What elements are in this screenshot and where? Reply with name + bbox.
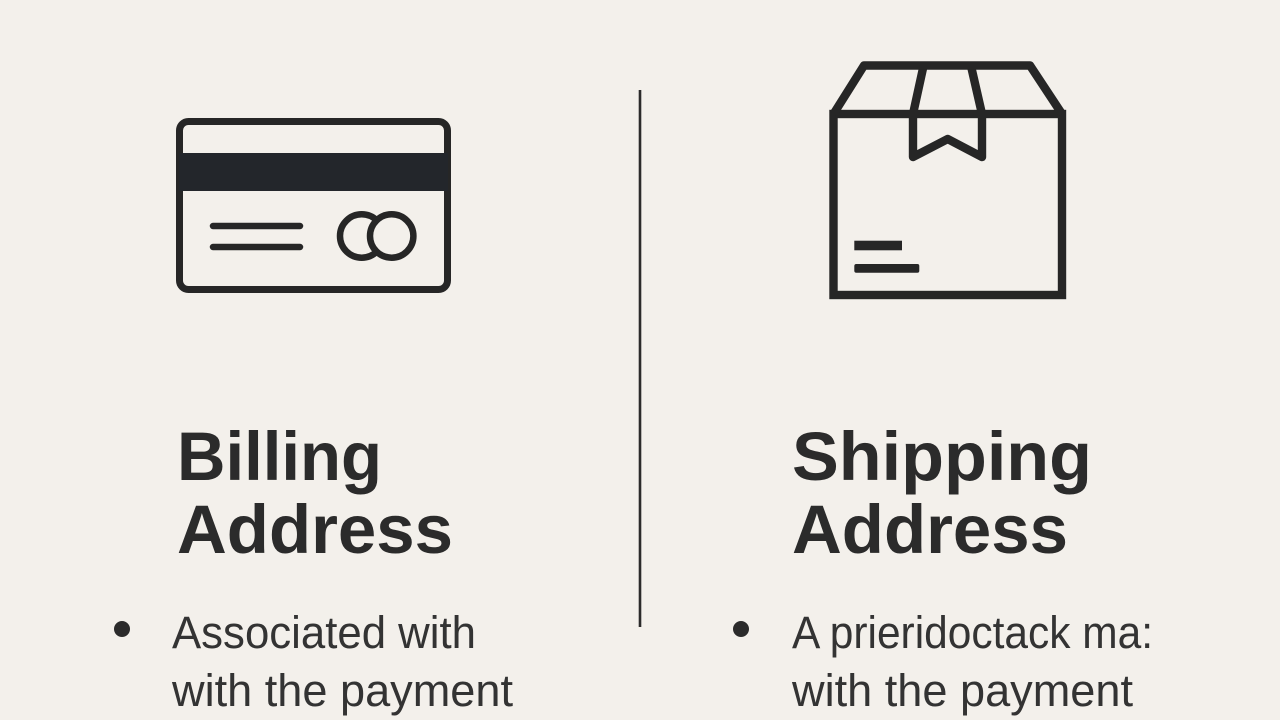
panel: billing address <box>114 122 513 716</box>
icon: package box <box>834 66 1062 295</box>
heading: shipping address: Address <box>792 491 1068 568</box>
panel: shipping address <box>733 66 1153 716</box>
divider <box>639 90 641 627</box>
bullet text: shipping: A prieridoctack ma: <box>792 607 1153 658</box>
icon: credit card <box>179 122 448 290</box>
heading: billing address: Address <box>177 491 453 568</box>
bullet text: billing: with the payment <box>171 665 513 716</box>
heading: shipping address: Shipping <box>792 418 1092 495</box>
bullet text: billing: Associated with <box>172 607 476 658</box>
heading: billing address: Billing <box>177 418 382 495</box>
bullet text: shipping: with the payment <box>791 665 1133 716</box>
bullet dot <box>733 621 749 637</box>
bullet dot <box>114 621 130 637</box>
